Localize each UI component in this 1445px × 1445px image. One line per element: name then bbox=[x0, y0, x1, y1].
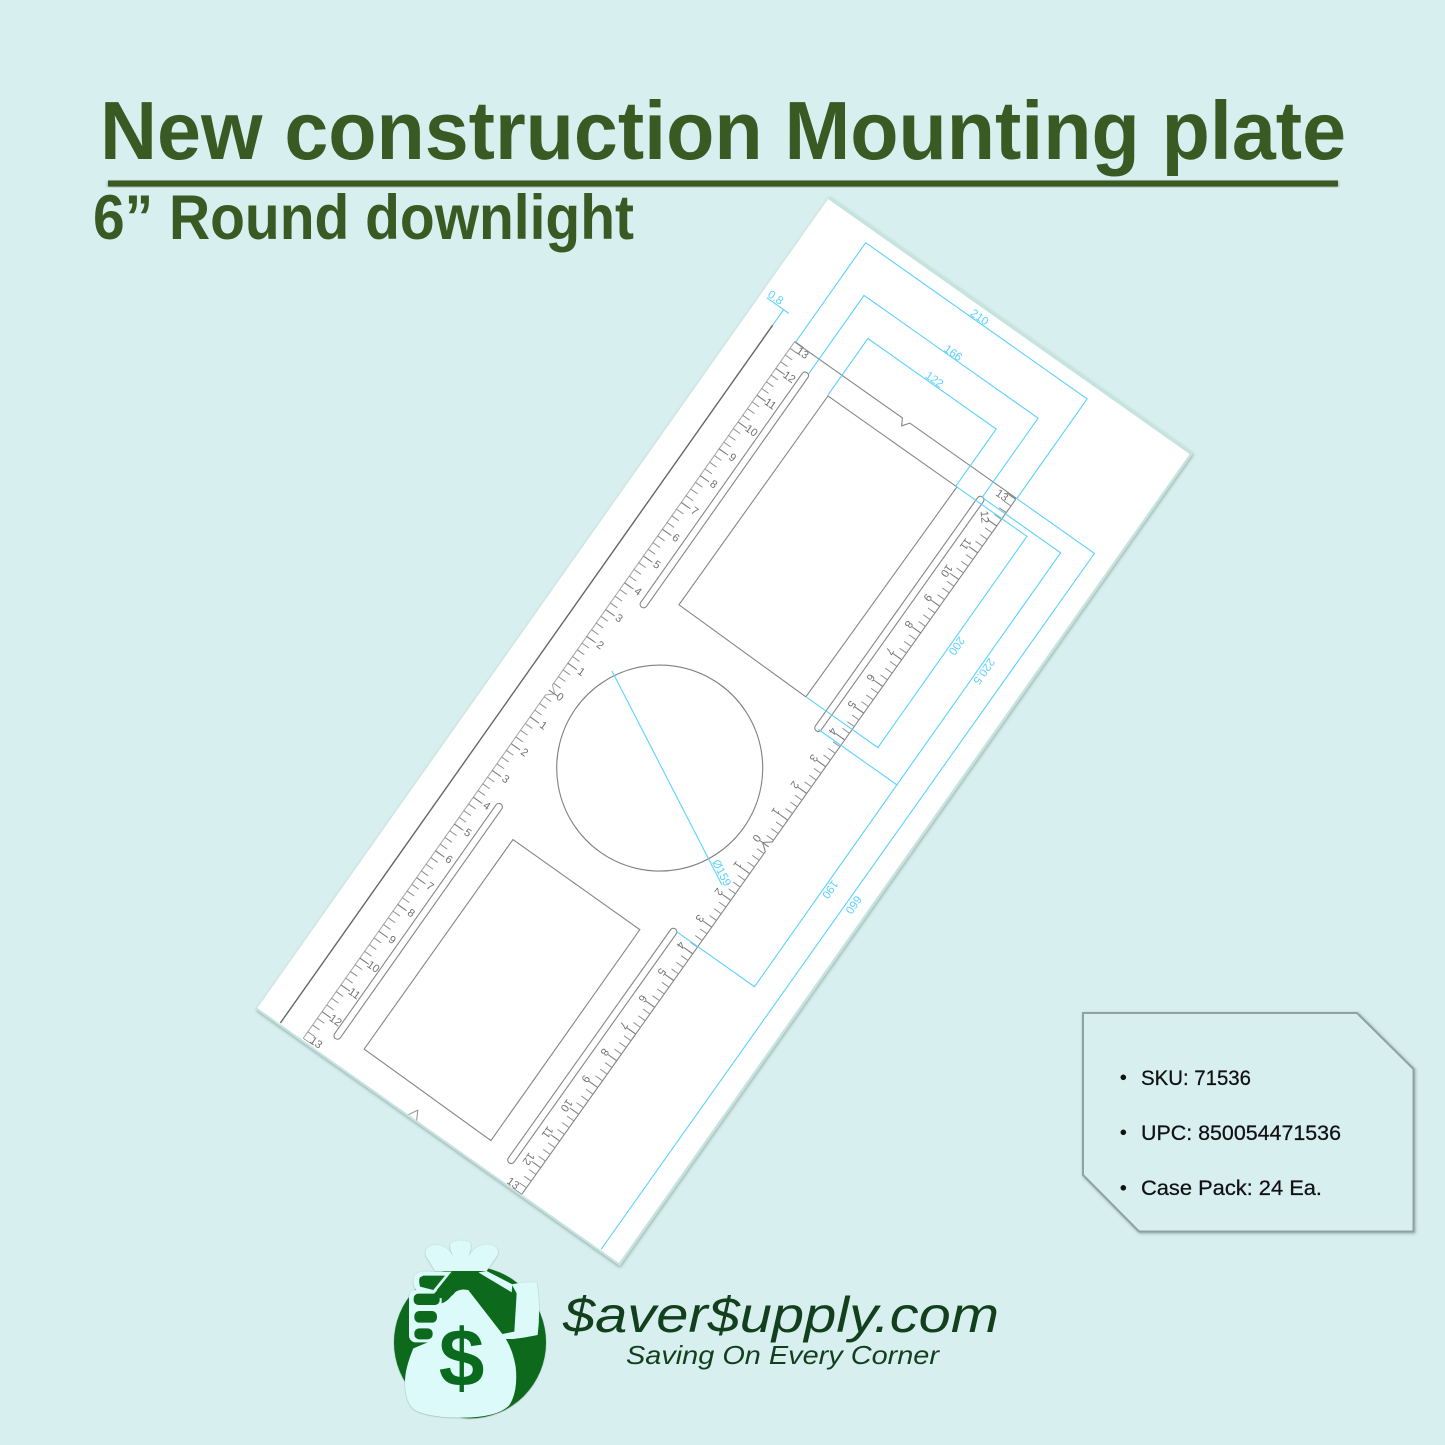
dimension labels: 122 bbox=[923, 370, 945, 391]
dimension 0.8 bbox=[756, 298, 789, 329]
slot upper right bbox=[813, 495, 985, 733]
thumb outline bbox=[413, 1272, 452, 1292]
slot lower left bbox=[333, 802, 504, 1041]
slot upper left bbox=[639, 371, 810, 609]
slot lower right bbox=[506, 927, 678, 1165]
left ruler numbers: 7 bbox=[688, 505, 700, 518]
right ruler numbers: 9 bbox=[578, 1072, 592, 1084]
dimension labels: 190 bbox=[819, 878, 840, 900]
left ruler numbers: 12 bbox=[780, 369, 797, 386]
left ruler inch ticks bbox=[308, 344, 800, 1042]
right ruler numbers: 10 bbox=[938, 562, 955, 579]
right ruler numbers: 2 bbox=[711, 885, 725, 897]
sheet edge bbox=[256, 197, 1193, 1266]
long side line bbox=[280, 325, 773, 1023]
left ruler numbers: 13 bbox=[794, 345, 811, 362]
dimension lines bbox=[264, 214, 1165, 1250]
right ruler numbers: 12 bbox=[520, 1150, 537, 1167]
title: New construction Mounting plate bbox=[100, 84, 1346, 177]
right ruler numbers: 3 bbox=[806, 752, 820, 764]
brand name: $aver$upply.com bbox=[562, 1287, 999, 1343]
right ruler numbers bbox=[501, 485, 1010, 1192]
right ruler numbers: 6 bbox=[863, 671, 877, 683]
top edge with notch bbox=[791, 342, 1016, 504]
upper window bbox=[678, 395, 957, 698]
right ruler ticks bbox=[518, 496, 1013, 1192]
left ruler numbers: 1 bbox=[575, 666, 587, 679]
Case Pack: Case Pack: 24 Ea. bbox=[1141, 1177, 1322, 1200]
right ruler numbers: 5 bbox=[844, 698, 858, 710]
subtitle: 6” Round downlight bbox=[93, 183, 634, 253]
right ruler numbers: 7 bbox=[616, 1019, 630, 1031]
left ruler numbers: 11 bbox=[762, 396, 778, 413]
right ruler numbers: 10 bbox=[558, 1097, 575, 1114]
right ruler and slots bbox=[496, 480, 1016, 1194]
dimension 166 bbox=[808, 295, 1038, 497]
panel: product details bbox=[1083, 1013, 1414, 1232]
title underline bbox=[108, 180, 1338, 186]
dimension labels: 0.8 bbox=[765, 289, 785, 308]
left ruler numbers: 10 bbox=[743, 423, 760, 440]
left ruler numbers: 3 bbox=[499, 773, 511, 786]
right ruler numbers: 13 bbox=[504, 1175, 521, 1192]
dimension labels: 166 bbox=[941, 343, 964, 364]
left ruler numbers bbox=[307, 345, 813, 1053]
left ruler numbers: 8 bbox=[707, 478, 719, 491]
cuff bbox=[502, 1282, 539, 1339]
right ruler numbers: 4 bbox=[825, 725, 839, 737]
left ruler numbers: 11 bbox=[346, 986, 362, 1002]
left ruler numbers: 5 bbox=[651, 558, 663, 572]
right ruler numbers: 2 bbox=[787, 778, 801, 790]
left ruler numbers: 6 bbox=[670, 532, 681, 545]
left ruler spine bbox=[303, 342, 800, 1042]
dimension labels: 200 bbox=[946, 634, 966, 657]
center circle cutout bbox=[516, 625, 803, 912]
right ruler numbers: 1 bbox=[730, 859, 744, 871]
finger 3 bbox=[414, 1328, 433, 1339]
right ruler numbers: 6 bbox=[635, 992, 649, 1004]
right ruler numbers: 1 bbox=[768, 805, 782, 817]
hand bbox=[434, 1273, 517, 1335]
lower window bbox=[363, 839, 640, 1141]
wrist band bbox=[478, 1271, 512, 1292]
left ruler numbers: 6 bbox=[443, 853, 455, 867]
icon: money bag in hand bbox=[394, 1240, 546, 1418]
left ruler numbers: 2 bbox=[518, 746, 530, 759]
left ruler numbers: 0 bbox=[554, 691, 566, 704]
left ruler numbers: 12 bbox=[327, 1012, 344, 1029]
dimension labels bbox=[503, 206, 1180, 916]
right ruler numbers: 8 bbox=[597, 1046, 611, 1058]
left ruler numbers: 4 bbox=[632, 585, 644, 599]
right ruler spine bbox=[516, 495, 1016, 1194]
sheet bbox=[257, 199, 1190, 1263]
left ruler numbers: 7 bbox=[424, 880, 436, 893]
green disc bbox=[394, 1266, 546, 1418]
left ruler numbers: 3 bbox=[613, 612, 625, 625]
right ruler numbers: 0 bbox=[749, 832, 763, 844]
dimension labels: 220.5 bbox=[970, 656, 997, 686]
right ruler numbers: 12 bbox=[978, 510, 991, 524]
left ruler numbers: 8 bbox=[405, 907, 417, 920]
right ruler numbers: 4 bbox=[673, 939, 687, 951]
right ruler numbers: 8 bbox=[901, 618, 915, 630]
logo bbox=[394, 1240, 999, 1418]
left ruler numbers: 9 bbox=[386, 934, 398, 947]
plate outline bbox=[280, 325, 1017, 1196]
bag body bbox=[405, 1290, 516, 1418]
thumb bbox=[419, 1276, 445, 1290]
SKU: SKU: 71536 bbox=[1141, 1067, 1251, 1090]
diameter label: Ø159 bbox=[709, 858, 733, 888]
finger surround bbox=[409, 1290, 442, 1342]
bag ears bbox=[425, 1240, 498, 1271]
UPC: UPC: 850054471536 bbox=[1141, 1122, 1341, 1145]
left ruler numbers: 9 bbox=[726, 451, 738, 465]
right ruler numbers: 11 bbox=[957, 536, 973, 552]
finger 2 bbox=[414, 1311, 437, 1323]
diameter line bbox=[612, 671, 722, 885]
panel outline bbox=[1083, 1013, 1414, 1232]
left ruler numbers: 10 bbox=[365, 959, 381, 976]
dimension 220.5 and 190 bbox=[676, 497, 1061, 987]
left ruler numbers: 2 bbox=[594, 639, 606, 652]
finger 1 bbox=[414, 1294, 440, 1305]
dimension labels: 660 bbox=[843, 893, 863, 916]
bottom notch bbox=[409, 1107, 422, 1120]
right ruler numbers: 13 bbox=[993, 487, 1010, 504]
right ruler numbers: 3 bbox=[692, 912, 706, 924]
right ruler numbers: 7 bbox=[882, 645, 896, 657]
left ruler numbers: 13 bbox=[307, 1035, 324, 1052]
right ruler inch ticks bbox=[517, 496, 1012, 1191]
dollar sign: $ bbox=[439, 1313, 484, 1404]
tagline: Saving On Every Corner bbox=[626, 1340, 940, 1370]
dimension 660 bbox=[525, 498, 1094, 1250]
dimension 210 bbox=[795, 243, 1087, 499]
panel: technical drawing sheet bbox=[256, 197, 1193, 1267]
left ruler numbers: 1 bbox=[537, 719, 549, 733]
right ruler numbers: 9 bbox=[920, 591, 934, 603]
diameter dimension bbox=[612, 671, 733, 888]
left ruler numbers: 4 bbox=[480, 800, 492, 813]
dimension 122 bbox=[828, 338, 996, 486]
right ruler numbers: 11 bbox=[539, 1124, 555, 1140]
dimension labels: 210 bbox=[968, 307, 990, 328]
left ruler ticks bbox=[307, 344, 798, 1041]
dimension 200 bbox=[807, 486, 1027, 748]
left ruler numbers: 5 bbox=[462, 827, 473, 840]
right ruler numbers: 5 bbox=[654, 966, 668, 977]
